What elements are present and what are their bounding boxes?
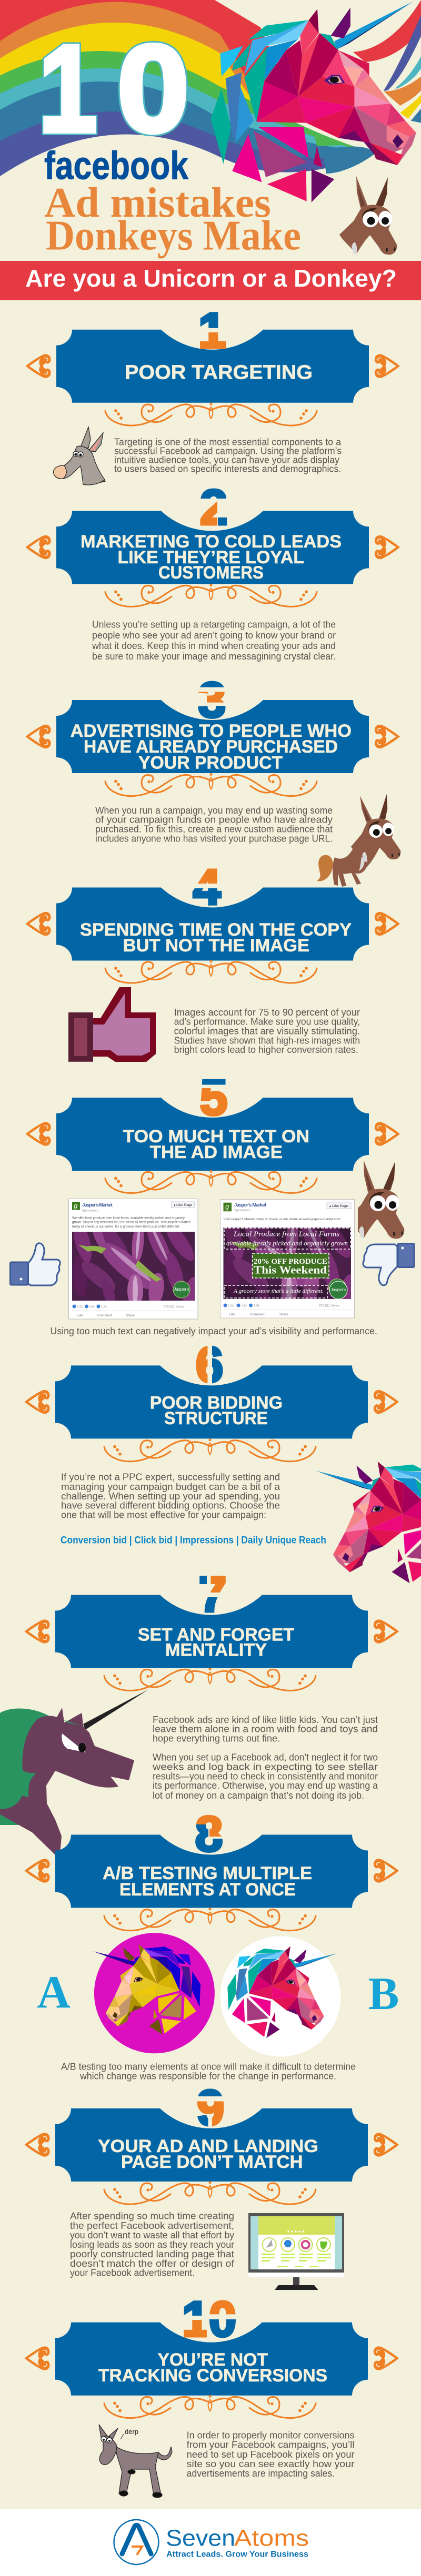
number 8: 8 — [195, 1807, 223, 1862]
donkey: gray — [54, 427, 105, 485]
hero: ribbons behind unicorn — [314, 0, 421, 146]
number 10: 0 — [209, 2291, 236, 2347]
number 1 — [200, 312, 226, 349]
ad card: good: We offer local produce from local farms, available freshly picked and organicly — [72, 1216, 185, 1220]
number 5: 5 — [200, 1070, 227, 1126]
text 1: successful Facebook ad campaign. Using the platform’s — [114, 445, 342, 456]
heading 1: POOR TARGETING — [125, 362, 313, 384]
caption 5: Using too much text can negatively impact your ad’s visibility and performance. — [50, 1326, 377, 1336]
text 3: purchased. To fix this, create a new custom audience that — [95, 824, 333, 835]
ad card: good: Sponsored · ◦ — [82, 1210, 101, 1213]
text 6: challenge. When setting up your ad spending, you — [61, 1491, 280, 1502]
text 10: In order to properly monitor conversions — [187, 2430, 355, 2440]
subtitle: Donkeys Make: Donkeys Make — [46, 213, 301, 259]
text 7: leave them alone in a room with food and toys and — [153, 1724, 378, 1735]
number 3: 3 — [198, 672, 226, 728]
heading 5: THE AD IMAGE — [150, 1142, 283, 1162]
heading 6: POOR BIDDING — [150, 1393, 283, 1413]
bidding options: Conversion bid | Click bid | Impressions | Daily Unique Reach — [61, 1535, 326, 1546]
text 9: poorly constructed landing page that — [70, 2249, 234, 2259]
number 8: 8 — [195, 1807, 223, 1862]
text 7: lot of money on a campaign that’s not doing its job. — [153, 1790, 364, 1801]
flourish 10 — [104, 2396, 316, 2418]
ad card: too much text: Visit Jasper’s Market today or check us out online at www.jaspers-market.com. — [223, 1218, 342, 1221]
text 6: managing your campaign budget can be a bit of a — [61, 1482, 280, 1492]
text 1: Targeting is one of the most essential components to a — [114, 437, 342, 447]
text 3: of your campaign funds on people who have already — [95, 815, 333, 825]
heading 5: TOO MUCH TEXT ON — [123, 1127, 309, 1147]
flourish 4 — [105, 961, 317, 983]
flourish 1 — [105, 403, 317, 425]
subtitle: Ad mistakes: Ad mistakes — [44, 180, 271, 226]
text 7: its performance. Otherwise, you may end up wasting a — [153, 1780, 378, 1791]
facebook wordmark: facebook — [44, 144, 188, 188]
ad card: good: Like — [77, 1314, 84, 1317]
number 7: 7 — [199, 1567, 226, 1622]
side ornaments 9 — [24, 2133, 399, 2157]
variant B circle — [218, 1931, 341, 2056]
number 9: 9 — [197, 2080, 224, 2136]
logo wordmark: Atoms — [234, 2526, 309, 2551]
number 10: 1 — [182, 2291, 209, 2347]
ad card: good: g — [74, 1202, 78, 1210]
text 7: When you set up a Facebook ad, don’t neglect it for two — [153, 1752, 378, 1763]
red tagline band: Are you a Unicorn or a Donkey? — [25, 265, 397, 292]
flourish 2 — [105, 584, 317, 606]
logo wordmark: Seven — [166, 2526, 235, 2551]
logo wordmark — [166, 2526, 309, 2551]
heading 10: YOU’RE NOT — [158, 2350, 268, 2370]
speech: derp: derp — [125, 2428, 138, 2436]
heading 9: PAGE DON’T MATCH — [121, 2152, 303, 2172]
number 7: 7 — [199, 1567, 226, 1622]
donkey: brown full body — [317, 792, 402, 887]
side ornaments 1 — [25, 354, 400, 378]
ad card: good: 670,611 Views — [164, 1305, 184, 1309]
donkey: derp — [99, 2425, 172, 2498]
icon: facebook thumbs up — [11, 1243, 60, 1285]
text 3: When you run a campaign, you may end up wasting some — [95, 805, 333, 816]
ad card: good: 1.5k — [101, 1305, 107, 1309]
text 3: includes anyone who has visited your purchase page URL. — [95, 833, 333, 844]
flourish 8 — [104, 1909, 316, 1931]
text 9: your Facebook advertisement. — [70, 2267, 195, 2278]
text 2: what it does. Keep this in mind when creating your ads and — [92, 641, 336, 651]
heading 10 — [98, 2350, 327, 2386]
heading 8: A/B TESTING MULTIPLE — [103, 1863, 312, 1883]
icon: purple thumbs up — [68, 987, 156, 1062]
side ornaments 7 — [24, 1619, 399, 1644]
number 7 — [199, 1576, 226, 1612]
heading 9 — [98, 2136, 318, 2172]
heading 4: SPENDING TIME ON THE COPY — [80, 920, 352, 940]
text 1: to users based on specific interests and demographics. — [114, 463, 341, 474]
ad card: too much text: 1.5k — [254, 1304, 260, 1307]
section 4 — [25, 860, 400, 1062]
heading 3: YOUR PRODUCT — [138, 753, 283, 773]
text 1: intuitive audience tools, you can have your ads display — [114, 454, 339, 465]
hero: unicorn head — [211, 2, 416, 202]
heading 8: ELEMENTS AT ONCE — [119, 1880, 296, 1900]
banner 5 — [56, 1098, 369, 1171]
heading 2 — [81, 532, 342, 583]
text 7: hope everything turns out fine. — [153, 1733, 280, 1744]
text 1 — [114, 437, 342, 474]
heading 4 — [80, 920, 352, 956]
text 2: be sure to make your image and messagining crystal clear. — [92, 651, 336, 662]
ad card: too much text: Share — [279, 1313, 288, 1316]
text 9: After spending so much time creating — [70, 2211, 234, 2222]
number 4 — [193, 869, 222, 906]
donkey head peeking — [358, 1160, 404, 1239]
banner 6 — [55, 1365, 368, 1438]
text 7: Facebook ads are kind of like little kids. You can’t just — [153, 1715, 378, 1725]
ad card: good: ▴ Like Page — [173, 1203, 193, 1207]
banner 3 — [56, 700, 369, 773]
number 10 — [184, 2300, 236, 2338]
text 7 — [152, 1715, 378, 1801]
text 8: which change was responsible for the change in performance. — [79, 2071, 336, 2081]
text 7: weeks and log back in expecting to see stellar — [152, 1762, 378, 1772]
number 1: 1 — [198, 303, 226, 359]
ad card: too much text: Like — [229, 1313, 236, 1316]
section 9 — [24, 2080, 399, 2290]
title number 10: 1 — [39, 19, 97, 158]
icon: landing page monitor — [248, 2213, 344, 2290]
flourish 6 — [104, 1439, 316, 1462]
ad card: too much text: available freshly picked and organicly grown — [226, 1240, 348, 1247]
ad card: good: Comment — [97, 1314, 112, 1317]
angry purple unicorn — [0, 1689, 148, 1860]
text 10: need to set up Facebook pixels on your — [187, 2449, 355, 2460]
text 10: site so you can see exactly how your — [187, 2459, 355, 2469]
heading 6 — [150, 1393, 283, 1428]
heading 2: CUSTOMERS — [158, 563, 264, 583]
ad card: good: 414 — [89, 1305, 95, 1309]
text 9: you don’t want to waste all that effort by — [70, 2230, 234, 2240]
ad card: too much text: Local Produce from Local Farms — [233, 1231, 340, 1239]
text 8 — [61, 2062, 356, 2081]
number 9: 9 — [197, 2080, 224, 2136]
text 10: from your Facebook campaigns, you’ll — [187, 2440, 355, 2450]
variant A circle — [92, 1929, 215, 2053]
ad card: good: 5.4k — [77, 1305, 83, 1309]
section 7 — [0, 1567, 399, 1860]
title number 10 — [39, 19, 189, 158]
banner 9 — [55, 2108, 368, 2182]
side ornaments 4 — [25, 912, 400, 936]
number 2: 2 — [200, 480, 227, 535]
title number 10: 0 — [117, 19, 189, 158]
title number 10: 1 — [39, 19, 97, 158]
logo tagline: Attract Leads. Grow Your Business — [166, 2550, 308, 2559]
section 8 — [24, 1807, 399, 2081]
number 10: 0 — [209, 2291, 236, 2347]
banner 8 — [55, 1834, 368, 1908]
ad card: good: grown. Stop in any weekend for 20% off on all fresh produce. Visit Jasper’s Market — [72, 1221, 191, 1224]
ad card: too much text: This Weekend — [254, 1264, 327, 1276]
text 8: A/B testing too many elements at once will make it difficult to determine — [61, 2062, 356, 2072]
ad card: good: Jasper’s Market — [82, 1202, 113, 1208]
text 4: Images account for 75 to 90 percent of your — [174, 1007, 360, 1018]
speech: derp — [121, 2428, 138, 2439]
title number 10: 0 — [117, 19, 189, 158]
number 7: 7 — [199, 1567, 226, 1622]
text 2 — [92, 620, 336, 662]
ad card: too much text: A grocery store that’s a little different. — [233, 1289, 324, 1294]
heading 8 — [103, 1863, 312, 1900]
text 4: ad’s performance. Make sure you use quality, — [174, 1017, 360, 1027]
heading 5 — [123, 1127, 309, 1162]
number 2: 2 — [200, 480, 227, 535]
heading 2: LIKE THEY’RE LOYAL — [118, 547, 304, 567]
ad card: good — [68, 1199, 201, 1319]
number 9 — [197, 2088, 224, 2127]
letter B: B — [368, 1969, 399, 2020]
heading 3: HAVE ALREADY PURCHASED — [84, 737, 338, 757]
ad card: too much text: Sponsored · ◦ — [234, 1209, 253, 1212]
hero: rainbow — [0, 0, 376, 316]
text 10: advertisements are impacting sales. — [187, 2468, 335, 2479]
side ornaments 2 — [25, 535, 400, 559]
number 4: 4 — [193, 860, 221, 916]
number 9: 9 — [197, 2080, 224, 2136]
ad card: good: Share — [126, 1314, 135, 1317]
text 10 — [187, 2430, 355, 2479]
heading 7: MENTALITY — [165, 1640, 267, 1660]
number 3: 3 — [198, 672, 226, 728]
text 4: colorful images that are visually stimulating. — [174, 1026, 360, 1036]
heading 3 — [71, 721, 352, 773]
text 7: results—you need to check in consistently and monitor — [153, 1771, 378, 1781]
ad card: too much text: 670,611 Views — [319, 1304, 339, 1307]
logo mark — [114, 2520, 159, 2564]
red tagline band — [0, 261, 421, 300]
flourish 3 — [105, 774, 317, 796]
heading 2: MARKETING TO COLD LEADS — [81, 532, 342, 552]
ad card: too much text — [220, 1199, 357, 1318]
number 8 — [195, 1814, 223, 1853]
heading 9: YOUR AD AND LANDING — [98, 2136, 318, 2156]
text 9 — [70, 2211, 235, 2278]
icon: facebook thumbs down — [363, 1243, 414, 1285]
section 3 — [25, 672, 402, 887]
banner 4 — [56, 888, 369, 960]
section 10 — [24, 2291, 399, 2498]
text 3 — [95, 805, 333, 844]
side ornaments 6 — [24, 1390, 399, 1414]
ad card: too much text: ▴ Like Page — [329, 1204, 348, 1208]
text 6: If you’re not a PPC expert, successfully setting and — [61, 1472, 280, 1483]
number 3: 3 — [198, 672, 226, 728]
heading 4: BUT NOT THE IMAGE — [123, 936, 309, 956]
letter A: A — [37, 1967, 71, 2018]
banner 7 — [55, 1595, 368, 1668]
number 5 — [200, 1079, 227, 1117]
unicorn head facing left — [314, 1441, 421, 1599]
side ornaments 8 — [24, 1859, 399, 1883]
number 2 — [200, 488, 227, 526]
side ornaments 3 — [25, 725, 400, 748]
number 1: 1 — [198, 303, 226, 359]
side ornaments 5 — [25, 1122, 400, 1146]
text 9: losing leads as soon as they reach your — [70, 2239, 234, 2250]
text 6: have several different bidding options. Choose the — [61, 1500, 280, 1511]
flourish 5 — [105, 1171, 317, 1193]
section 1 — [25, 303, 400, 485]
ad card: too much text: Comment — [250, 1313, 265, 1316]
ad card: too much text: 5.4k — [228, 1304, 234, 1307]
heading 7: SET AND FORGET — [138, 1625, 294, 1645]
text 2: Unless you’re setting up a retargeting campaign, a lot of the — [92, 620, 336, 630]
number 2: 2 — [200, 480, 227, 535]
heading 7 — [138, 1625, 294, 1660]
number 5: 5 — [200, 1070, 227, 1126]
text 4: bright colors lead to higher conversion rates. — [174, 1044, 358, 1055]
banner 1 — [56, 330, 369, 403]
text 2: people who see your ad aren’t going to know your brand or — [92, 630, 336, 641]
text 4: Studies have shown that high-res images with — [174, 1035, 360, 1046]
heading 3: ADVERTISING TO PEOPLE WHO — [71, 721, 352, 741]
number 6 — [196, 1345, 223, 1383]
number 10: 1 — [182, 2291, 209, 2347]
text 9: doesn’t match the offer or design of — [70, 2258, 235, 2269]
ad card: good: today or check us out online. It’s a grocery store that’s just a little different. — [72, 1225, 180, 1229]
ad card: too much text: Jasper’s Market — [234, 1202, 267, 1208]
flourish 7 — [104, 1668, 316, 1690]
text 6: one that will be most effective for your campaign: — [61, 1510, 266, 1520]
side ornaments 10 — [24, 2346, 399, 2370]
number 4: 4 — [193, 860, 221, 916]
heading 6: STRUCTURE — [164, 1408, 268, 1428]
text 9: the perfect Facebook advertisement, — [70, 2220, 234, 2231]
section 5 — [11, 1070, 414, 1336]
ad card: too much text: g — [225, 1203, 229, 1211]
banner 2 — [56, 511, 369, 584]
number 6: 6 — [196, 1337, 223, 1393]
hero: donkey head — [339, 176, 397, 255]
flourish 9 — [104, 2182, 316, 2204]
footer — [0, 2509, 421, 2576]
ad card: too much text: 414 — [242, 1304, 247, 1307]
banner 10 — [55, 2323, 368, 2396]
number 6: 6 — [196, 1337, 223, 1393]
ad card: too much text: 20% OFF PRODUCE — [254, 1257, 327, 1266]
ad card: too much text: Jasper's — [330, 1287, 346, 1292]
section 2 — [25, 480, 400, 662]
heading 10: TRACKING CONVERSIONS — [98, 2366, 327, 2386]
section 6 — [24, 1337, 421, 1599]
number 3 — [198, 681, 225, 719]
text 6 — [61, 1472, 280, 1520]
text 4 — [174, 1007, 360, 1055]
